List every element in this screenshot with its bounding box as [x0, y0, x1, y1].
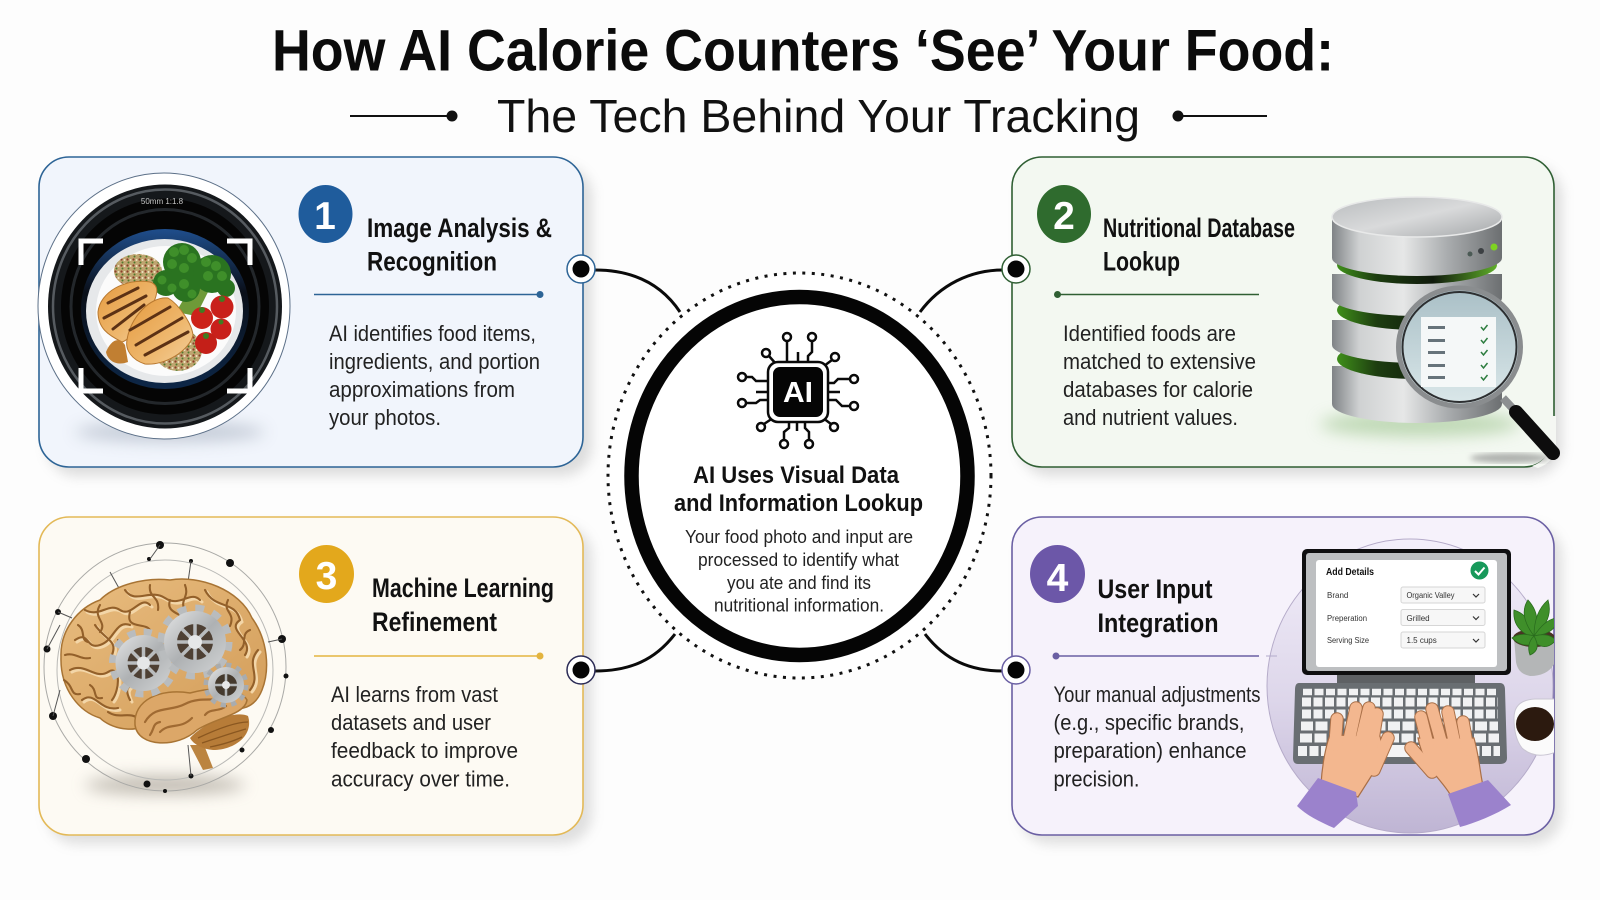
sleeves [1297, 778, 1511, 828]
brain stem [190, 745, 213, 770]
body text 3 [331, 682, 518, 792]
temporal lobe [135, 689, 247, 743]
tablet: 1.5 cups [1406, 636, 1437, 645]
body text 2: Identified foods are [1063, 321, 1236, 346]
connector: panel 3 to hub [595, 634, 675, 671]
tablet: Serving Size [1327, 636, 1370, 645]
body text 3: AI learns from vast [331, 682, 498, 707]
connector node 3 [567, 656, 595, 684]
icon: AI chip: AI [783, 377, 813, 409]
number badge 2 [1037, 185, 1091, 243]
body text 2: matched to extensive [1063, 349, 1256, 374]
heading 3 [372, 573, 554, 637]
food: broccoli [153, 243, 235, 316]
divider 4 [1052, 652, 1277, 660]
heading 2: Nutritional Database [1103, 213, 1295, 243]
icon: camera lens with food plate [38, 173, 290, 442]
central hub [608, 273, 991, 678]
brain folds [64, 585, 258, 720]
panel: user input integration [1002, 517, 1562, 844]
solid ring [632, 297, 968, 655]
connector: panel 1 to hub [595, 270, 680, 312]
card 4 background [1012, 517, 1554, 835]
body text 2: and nutrient values. [1063, 405, 1238, 430]
hub body text: Your food photo and input are [685, 526, 913, 547]
tablet: Brand [1327, 591, 1348, 600]
heading 3: Machine Learning [372, 573, 554, 603]
hub heading: and Information Lookup [674, 490, 923, 517]
number badge 1: 1 [314, 195, 336, 238]
divider 1 [314, 291, 544, 298]
number badge 4 [1030, 545, 1085, 603]
icon: brain with gears and network [44, 541, 288, 794]
body text 1 [329, 321, 540, 430]
gears [114, 609, 246, 704]
heading 4 [1098, 574, 1218, 638]
body text 3: accuracy over time. [331, 766, 510, 792]
connector node 4 [1002, 656, 1030, 684]
panel: image analysis and recognition [38, 157, 595, 476]
body text 1: AI identifies food items, [329, 321, 536, 346]
heading 1: Image Analysis & [367, 213, 552, 243]
body text 4: Your manual adjustments [1054, 682, 1260, 707]
icon: database with magnifier [1320, 197, 1553, 463]
icon: coffee cup [1514, 699, 1556, 755]
cerebellum [190, 714, 249, 750]
number badge 4: 4 [1047, 557, 1069, 600]
keyboard [1293, 683, 1507, 764]
connector node 1 [567, 255, 595, 283]
tablet: Grilled [1406, 614, 1430, 623]
heading 3: Refinement [372, 607, 497, 637]
body text 1: ingredients, and portion [329, 349, 540, 374]
card 3 background [39, 517, 583, 835]
connector: panel 2 to hub [920, 270, 1003, 312]
body text 1: approximations from [329, 377, 515, 402]
heading 4: Integration [1098, 608, 1218, 638]
subtitle ornament: right [1172, 110, 1267, 122]
hub body text [685, 526, 913, 616]
cerebrum [61, 579, 267, 729]
number badge 3: 3 [316, 555, 337, 598]
body text 3: datasets and user [331, 710, 491, 735]
panel: machine learning refinement [39, 517, 595, 844]
subtitle ornament: left [350, 110, 458, 122]
connector: panel 4 to hub [925, 634, 1003, 671]
dotted ring [608, 273, 991, 678]
heading 4: User Input [1098, 574, 1213, 604]
number badge 3 [299, 545, 354, 603]
body text 2: databases for calorie [1063, 377, 1253, 402]
heading 2: Lookup [1103, 246, 1180, 276]
body text 4 [1054, 682, 1260, 792]
magnifier [1398, 288, 1553, 453]
body text 4: (e.g., specific brands, [1054, 710, 1244, 735]
divider 3 [314, 652, 544, 660]
divider 2 [1054, 291, 1259, 298]
body text 2 [1063, 321, 1256, 430]
card 1 background [39, 157, 583, 467]
heading 1 [367, 213, 552, 276]
tablet [1302, 549, 1511, 684]
tablet: Add Details [1326, 567, 1374, 578]
icon: camera lens with food plate: 50mm 1:1.8 [141, 197, 184, 206]
right hand [1411, 709, 1484, 798]
icon: tablet, keyboard and hands [1267, 539, 1553, 833]
body text 3: feedback to improve [331, 738, 518, 763]
card 2 background [1012, 157, 1554, 467]
subtitle: The Tech Behind Your Tracking [497, 90, 1140, 142]
tablet: Preperation [1327, 614, 1367, 623]
body text 4: preparation) enhance [1054, 738, 1246, 763]
hub body text: you ate and find its [727, 572, 871, 593]
title: How AI Calorie Counters ‘See’ Your Food: [272, 18, 1334, 84]
focus brackets [81, 241, 250, 391]
food: grains [114, 254, 202, 371]
icon: AI chip [738, 333, 858, 448]
food: grilled chicken [98, 281, 193, 364]
hub heading: AI Uses Visual Data [693, 462, 900, 489]
number badge 1 [298, 185, 352, 243]
left hand [1321, 708, 1388, 797]
hub body text: processed to identify what [698, 549, 899, 570]
heading 2 [1103, 213, 1295, 276]
food: tomatoes [191, 296, 234, 354]
body text 1: your photos. [329, 405, 441, 430]
heading 1: Recognition [367, 246, 497, 276]
icon: potted plant [1512, 600, 1558, 676]
hub heading [674, 462, 923, 517]
hub body text: nutritional information. [714, 594, 884, 616]
card corner gap [1532, 416, 1556, 468]
tablet: Organic Valley [1406, 591, 1454, 600]
panel: nutritional database lookup [1002, 157, 1562, 476]
body text 4: precision. [1054, 766, 1140, 792]
number badge 2: 2 [1053, 195, 1075, 238]
connector node 2 [1002, 255, 1030, 283]
brain fold highlights [72, 592, 260, 710]
